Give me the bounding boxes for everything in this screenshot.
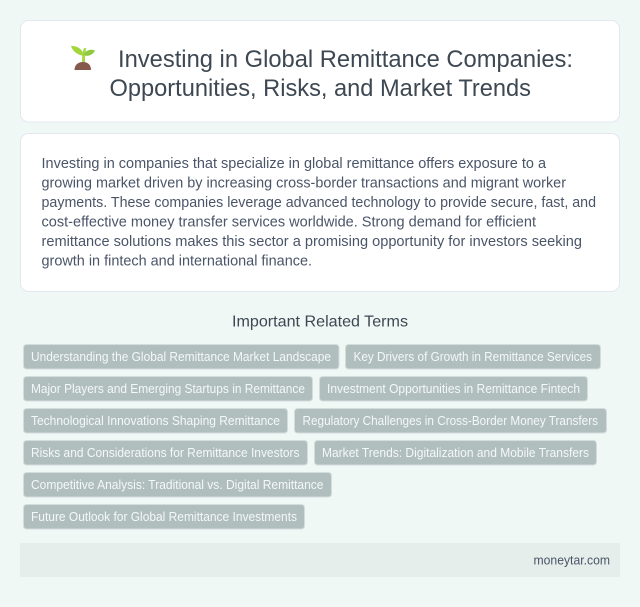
tag: major players: Major Players and Emerging Startups in Remittance bbox=[31, 381, 305, 396]
tag: regulatory challenges: Regulatory Challenges in Cross-Border Money Transfers bbox=[302, 413, 598, 428]
panel: summary text card bbox=[20, 134, 620, 292]
tag: technological innovations: Technological Innovations Shaping Remittance bbox=[31, 413, 280, 428]
icon: seedling bbox=[71, 46, 95, 70]
tag: technological innovations bbox=[24, 408, 288, 433]
tag: future outlook bbox=[24, 504, 304, 529]
tag: competitive analysis: Competitive Analysis: Traditional vs. Digital Remittance bbox=[31, 477, 324, 492]
summary paragraph: growing market driven by increasing cross-border transactions and migrant worker bbox=[42, 176, 566, 192]
tag: investment opportunities: Investment Opportunities in Remittance Fintech bbox=[327, 381, 580, 396]
summary paragraph: Investing in companies that specialize in global remittance offers exposure to a bbox=[42, 156, 546, 172]
tag: global remittance market landscape bbox=[24, 344, 339, 369]
summary paragraph: payments. These companies leverage advanced technology to provide secure, fast, and bbox=[42, 195, 596, 211]
tag: major players bbox=[24, 376, 312, 401]
tag: risks and considerations: Risks and Considerations for Remittance Investors bbox=[31, 445, 300, 460]
tag: competitive analysis bbox=[24, 472, 332, 497]
tag: future outlook: Future Outlook for Global Remittance Investments bbox=[31, 509, 297, 524]
summary paragraph: remittance solutions makes this sector a promising opportunity for investors seeking bbox=[42, 234, 582, 250]
tag: key drivers: Key Drivers of Growth in Remittance Services bbox=[354, 349, 592, 364]
footer bar bbox=[20, 543, 620, 577]
tag: regulatory challenges bbox=[294, 408, 606, 433]
title: Investing in Global Remittance Companies: bbox=[118, 46, 573, 73]
summary paragraph bbox=[42, 156, 596, 270]
tag: key drivers bbox=[346, 344, 600, 369]
summary paragraph: cost-effective money transfer services worldwide. Strong demand for efficient bbox=[42, 214, 536, 230]
summary paragraph: growth in fintech and international finance. bbox=[42, 254, 312, 270]
title bbox=[110, 46, 573, 102]
tag: risks and considerations bbox=[24, 440, 308, 465]
tag: investment opportunities bbox=[320, 376, 588, 401]
panel: related term tags bbox=[24, 344, 606, 529]
heading: important related terms: Important Related Terms bbox=[232, 314, 408, 330]
tag: market trends: Market Trends: Digitalization and Mobile Transfers bbox=[322, 445, 589, 460]
tag: market trends bbox=[314, 440, 596, 465]
footer source: moneytar.com bbox=[534, 552, 610, 568]
tag: global remittance market landscape: Understanding the Global Remittance Market Landscape bbox=[31, 349, 331, 364]
panel: title card bbox=[20, 20, 620, 122]
title: Opportunities, Risks, and Market Trends bbox=[110, 75, 531, 102]
